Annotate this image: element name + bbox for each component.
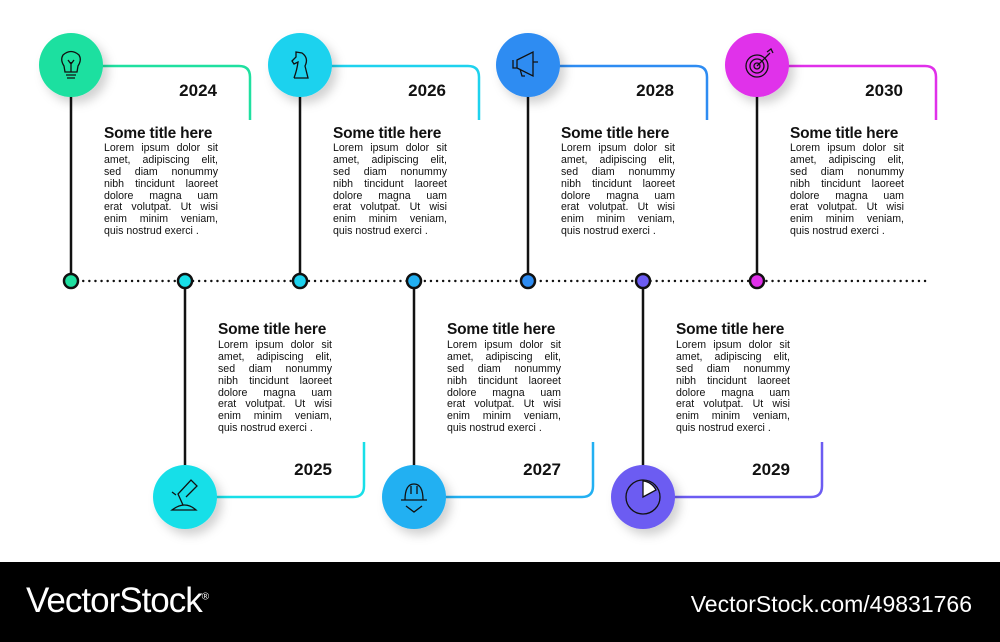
footer banner: VectorStock® xyxy=(26,581,208,620)
item 2029: Lorem ipsum dolor sit xyxy=(676,339,790,351)
item 2030: nibh tincidunt laoreet xyxy=(790,178,904,190)
item 2026: dolore magna uam xyxy=(333,190,447,202)
item 2028 xyxy=(561,81,675,237)
item 2029 xyxy=(676,321,790,479)
item 2030: dolore magna uam xyxy=(790,190,904,202)
item 2024: Lorem ipsum dolor sit xyxy=(104,142,218,154)
item 2024: amet, adipiscing elit, xyxy=(104,154,218,166)
icon circles xyxy=(39,33,789,529)
item 2024: erat volutpat. Ut wisi xyxy=(104,201,218,213)
item 2024: enim minim veniam, xyxy=(104,213,218,225)
item 2026 xyxy=(333,81,447,237)
item 2027: enim minim veniam, xyxy=(447,410,561,422)
nodes xyxy=(64,274,764,288)
item 2026: quis nostrud exerci . xyxy=(333,225,428,237)
item 2024: dolore magna uam xyxy=(104,190,218,202)
item 2030: enim minim veniam, xyxy=(790,213,904,225)
item 2024 xyxy=(104,81,218,237)
item 2027: quis nostrud exerci . xyxy=(447,422,542,434)
item 2028: Lorem ipsum dolor sit xyxy=(561,142,675,154)
footer banner: VectorStock.com/49831766 xyxy=(691,591,972,617)
item 2028: amet, adipiscing elit, xyxy=(561,154,675,166)
item 2025: 2025 xyxy=(294,460,332,479)
item 2025: sed diam nonummy xyxy=(218,363,332,375)
item 2026: nibh tincidunt laoreet xyxy=(333,178,447,190)
item 2028: 2028 xyxy=(636,81,674,100)
item 2029: nibh tincidunt laoreet xyxy=(676,375,790,387)
item 2024: nibh tincidunt laoreet xyxy=(104,178,218,190)
connectors xyxy=(71,65,757,497)
item 2029: dolore magna uam xyxy=(676,387,790,399)
item 2026: Lorem ipsum dolor sit xyxy=(333,142,447,154)
item 2030: 2030 xyxy=(865,81,903,100)
item 2029: 2029 xyxy=(752,460,790,479)
item 2029: quis nostrud exerci . xyxy=(676,422,771,434)
item 2028: quis nostrud exerci . xyxy=(561,225,656,237)
item 2025: dolore magna uam xyxy=(218,387,332,399)
item 2026: Some title here xyxy=(333,125,441,142)
footer banner xyxy=(0,562,1000,642)
item 2025: enim minim veniam, xyxy=(218,410,332,422)
item 2027: nibh tincidunt laoreet xyxy=(447,375,561,387)
item 2030: erat volutpat. Ut wisi xyxy=(790,201,904,213)
item 2028: Some title here xyxy=(561,125,669,142)
item 2025: Some title here xyxy=(218,321,326,338)
item 2026: amet, adipiscing elit, xyxy=(333,154,447,166)
item 2027 xyxy=(447,321,561,479)
item 2027: erat volutpat. Ut wisi xyxy=(447,398,561,410)
item 2027: Lorem ipsum dolor sit xyxy=(447,339,561,351)
item 2027: Some title here xyxy=(447,321,555,338)
item 2030 xyxy=(790,81,904,237)
item 2026: erat volutpat. Ut wisi xyxy=(333,201,447,213)
item 2028: enim minim veniam, xyxy=(561,213,675,225)
item 2026: sed diam nonummy xyxy=(333,166,447,178)
item 2026: 2026 xyxy=(408,81,446,100)
item 2028: sed diam nonummy xyxy=(561,166,675,178)
item 2024: quis nostrud exerci . xyxy=(104,225,199,237)
item 2030: sed diam nonummy xyxy=(790,166,904,178)
item 2025: erat volutpat. Ut wisi xyxy=(218,398,332,410)
item 2028: nibh tincidunt laoreet xyxy=(561,178,675,190)
item 2027: amet, adipiscing elit, xyxy=(447,351,561,363)
brackets xyxy=(100,66,936,497)
item 2027: dolore magna uam xyxy=(447,387,561,399)
item 2030: amet, adipiscing elit, xyxy=(790,154,904,166)
item 2030: Some title here xyxy=(790,125,898,142)
item 2024: 2024 xyxy=(179,81,217,100)
item 2025 xyxy=(218,321,332,479)
item 2029: erat volutpat. Ut wisi xyxy=(676,398,790,410)
icons xyxy=(62,49,773,514)
item 2024: sed diam nonummy xyxy=(104,166,218,178)
item 2027: 2027 xyxy=(523,460,561,479)
item 2027: sed diam nonummy xyxy=(447,363,561,375)
item 2030: Lorem ipsum dolor sit xyxy=(790,142,904,154)
item 2029: amet, adipiscing elit, xyxy=(676,351,790,363)
item 2029: enim minim veniam, xyxy=(676,410,790,422)
item 2025: quis nostrud exerci . xyxy=(218,422,313,434)
item 2030: quis nostrud exerci . xyxy=(790,225,885,237)
dotted timeline xyxy=(71,280,928,282)
item 2024: Some title here xyxy=(104,125,212,142)
item 2029: Some title here xyxy=(676,321,784,338)
item 2028: erat volutpat. Ut wisi xyxy=(561,201,675,213)
item 2026: enim minim veniam, xyxy=(333,213,447,225)
item 2025: Lorem ipsum dolor sit xyxy=(218,339,332,351)
item 2025: nibh tincidunt laoreet xyxy=(218,375,332,387)
item 2029: sed diam nonummy xyxy=(676,363,790,375)
item 2025: amet, adipiscing elit, xyxy=(218,351,332,363)
item 2028: dolore magna uam xyxy=(561,190,675,202)
